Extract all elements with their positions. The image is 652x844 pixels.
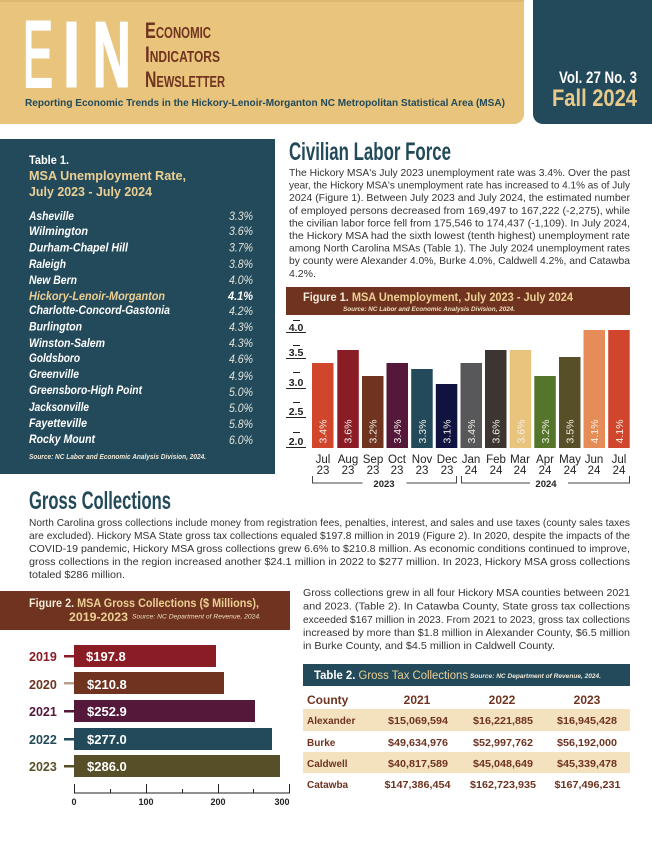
logo: EIN: E <box>23 2 53 106</box>
bar value labels: 3.6% <box>490 420 502 443</box>
text block: civilian labor force: 4.2%. <box>289 268 316 280</box>
month labels: Jan <box>462 454 480 466</box>
table 1 rows: Wilmington <box>29 226 88 238</box>
figure 1 header: Figure 1. MSA Unemployment, July 2023 - July 2024 <box>303 292 574 304</box>
table 2 rows: $40,817,589 <box>388 759 448 770</box>
bar value labels: 3.6% <box>516 420 528 443</box>
text block: gross collections intro: are excluded). Hickory MSA State gross tax collections equaled $197.8 million in 2019 (Figure 2). In 2020, despite the impacts of the <box>29 530 630 542</box>
bars with values: 2019 <box>29 650 57 664</box>
month labels: 24 <box>588 465 601 477</box>
table 1 heading <box>29 153 186 199</box>
masthead banner <box>0 0 524 124</box>
month labels: 24 <box>564 465 577 477</box>
text block: gross collections intro: North Carolina gross collections include money from registration fees, penalties, interest, and sales and use taxes (county sales taxes <box>29 517 630 529</box>
text block: gross collections by county: Gross collections grew in all four Hickory MSA counties between 2021 <box>303 587 630 599</box>
table 1 rows: New Bern <box>29 275 77 287</box>
text block: civilian labor force: by county were Alexander 4.0%, Burke 4.0%, Caldwell 4.2%, and Catawba <box>289 255 630 267</box>
table 2 rows: $45,339,478 <box>557 759 617 770</box>
table 1 rows: Greenville <box>29 369 80 381</box>
bars with values: $252.9 <box>87 704 127 719</box>
logo: EIN <box>23 2 131 106</box>
heading: Civilian Labor Force: Civilian Labor Force <box>289 138 451 166</box>
bar value labels: 4.1% <box>614 420 626 443</box>
table 2 header <box>303 664 630 686</box>
y axis: 3.5 <box>289 347 303 359</box>
table 1 heading: July 2023 - July 2024 <box>29 184 153 199</box>
table 1 rows: Goldsboro <box>29 353 80 365</box>
table 2 header: Table 2. Gross Tax Collections <box>314 670 468 682</box>
table 1 rows: Charlotte-Concord-Gastonia <box>29 305 171 317</box>
table 2 column headings: 2022 <box>489 693 516 707</box>
text block: gross collections by county: and 2023. (Table 2). In Catawba County, State gross tax collections <box>303 600 630 612</box>
chart: Figure 1 MSA unemployment <box>286 287 630 490</box>
table 2 rows: $15,069,594 <box>388 716 448 727</box>
table 1 rows <box>28 211 253 447</box>
bar value labels <box>318 420 626 443</box>
table 1 rows: 4.0% <box>229 275 253 287</box>
text block: gross collections intro: totaled $286 million. <box>29 569 125 581</box>
chart: Figure 2 gross collections <box>0 591 290 807</box>
bar value labels: 3.2% <box>368 420 380 443</box>
table: Table 2 gross tax collections <box>303 664 630 791</box>
month labels <box>316 454 626 477</box>
table 2 column headings <box>307 693 601 707</box>
table 1 rows: Burlington <box>29 322 82 334</box>
text block: civilian labor force: the Hickory MSA had the sixth lowest (tenth highest) unemployment rate <box>289 230 630 242</box>
bar value labels: 3.5% <box>564 420 576 443</box>
table 2 column headings: 2023 <box>574 693 601 707</box>
month labels: 23 <box>391 465 403 477</box>
table 1 rows: 4.3% <box>229 338 253 350</box>
x axis: 0 <box>71 797 77 807</box>
text block: gross collections intro <box>29 517 630 581</box>
table 1 rows: Raleigh <box>29 259 66 271</box>
month labels: 23 <box>441 465 453 477</box>
bar value labels: 3.2% <box>540 420 552 443</box>
x axis: 300 <box>274 797 290 807</box>
table 2 rows: $16,945,428 <box>557 716 617 727</box>
table 1 rows: 5.0% <box>229 403 253 415</box>
heading: Gross Collections: Gross Collections <box>29 487 171 515</box>
table 1 rows: Fayetteville <box>29 418 88 430</box>
month labels: 24 <box>613 465 626 477</box>
table 1 rows: 4.6% <box>229 354 253 366</box>
text block: gross collections by county: in Burke County, and $4.5 million in Caldwell County. <box>303 640 555 652</box>
table 2 header: Source: NC Department of Revenue, 2024. <box>470 673 601 680</box>
table 1 rows: 5.0% <box>229 387 253 399</box>
figure 1 header: Source: NC Labor and Economic Analysis Division, 2024. <box>343 306 515 313</box>
text block: civilian labor force <box>289 167 631 280</box>
text block: gross collections by county: exceeded $167 million in 2023. From 2021 to 2023, gross tax collections <box>303 614 630 626</box>
bars with values: $277.0 <box>87 732 127 747</box>
logo: EIN: N <box>93 2 131 106</box>
month labels: 24 <box>539 465 552 477</box>
table 1 rows: Winston-Salem <box>29 338 105 350</box>
table 1 heading: MSA Unemployment Rate, <box>29 168 186 183</box>
month labels: 24 <box>514 465 527 477</box>
month labels: Nov <box>412 454 432 466</box>
table 2 rows: $56,192,000 <box>557 738 617 749</box>
month labels: Oct <box>388 454 407 466</box>
y axis: 2.0 <box>289 436 303 448</box>
bars with values: $197.8 <box>86 649 126 664</box>
table 1 rows: Rocky Mount <box>29 434 96 446</box>
bar value labels: 3.4% <box>392 420 404 443</box>
text block: civilian labor force: 2024 (Figure 1). Between July 2023 and July 2024, the estimated number <box>289 192 630 204</box>
bar value labels: 3.4% <box>318 420 330 443</box>
month labels: 24 <box>490 465 503 477</box>
figure 1 header <box>286 287 630 315</box>
month labels: 23 <box>416 465 428 477</box>
table 1 rows: 5.8% <box>229 419 253 431</box>
text block: civilian labor force: the civilian labor force fell from 175,546 to 174,437 (-1,109). In July 2024, <box>289 217 630 229</box>
year brackets: 2024 <box>535 479 557 490</box>
text block: civilian labor force: of employed persons decreased from 169,497 to 167,222 (-2,275), while <box>289 205 630 217</box>
table 1 rows: 4.3% <box>229 322 253 334</box>
table 2 rows: $147,386,454 <box>384 780 451 791</box>
table 2 column headings: County <box>307 693 349 707</box>
row band: Alexander <box>303 709 630 731</box>
month labels: 24 <box>465 465 478 477</box>
newsletter name: NEWSLETTER <box>145 67 225 92</box>
table 1 rows: Durham-Chapel Hill <box>29 242 129 254</box>
table 1 rows: 4.9% <box>229 371 253 383</box>
logo: EIN: I <box>63 2 80 106</box>
table 1 heading: Table 1. <box>29 153 69 167</box>
table 2 rows: $167,496,231 <box>554 780 621 791</box>
x axis: 200 <box>210 797 226 807</box>
month labels: Dec <box>437 454 457 466</box>
month labels: Feb <box>486 454 506 466</box>
table 2 rows: $49,634,976 <box>388 738 448 749</box>
bars with values: 2023 <box>29 760 57 774</box>
table 1 rows: 3.7% <box>229 242 253 254</box>
table 2 rows <box>307 716 621 791</box>
table 1 rows: 3.8% <box>229 259 253 271</box>
month labels: Mar <box>510 454 530 466</box>
table 1 rows: 6.0% <box>229 435 253 447</box>
bars with values: $286.0 <box>87 759 127 774</box>
month labels: 23 <box>367 465 379 477</box>
month labels: May <box>559 454 581 466</box>
text block: civilian labor force: among North Carolina MSAs (Table 1). The July 2024 unemployment rates <box>289 243 630 255</box>
figure 2 header: Source: NC Department of Revenue, 2024. <box>132 614 261 620</box>
text block: gross collections intro: gross collections in the region increased another $24.1 million in 2022 to $277 million. In 2023, Hickory MSA gross collections <box>29 556 630 568</box>
month labels: Jun <box>585 454 603 466</box>
table 2 rows: Alexander <box>307 716 355 727</box>
y axis <box>286 320 306 448</box>
panel: Table 1 MSA unemployment rate <box>0 139 275 474</box>
y axis: 3.0 <box>289 377 303 389</box>
month labels: Sep <box>363 454 383 466</box>
table 1 rows: Greensboro-High Point <box>29 385 143 397</box>
x axis <box>71 784 290 807</box>
table 2 rows: $16,221,885 <box>473 716 533 727</box>
table 1 rows: Jacksonville <box>29 402 90 414</box>
issue badge <box>533 0 652 124</box>
bars with values: $210.8 <box>87 677 127 692</box>
table 1 rows: Asheville <box>28 211 75 223</box>
bars with values: 2020 <box>29 678 57 692</box>
x axis: 100 <box>138 797 154 807</box>
table 1 rows: 3.3% <box>229 211 253 223</box>
month labels: Jul <box>316 454 330 466</box>
bar value labels: 3.4% <box>466 420 478 443</box>
table 2 rows: Caldwell <box>307 759 348 770</box>
bar value labels: 4.1% <box>589 420 601 443</box>
text block: civilian labor force: The Hickory MSA's July 2023 unemployment rate was 3.4%. Over the past <box>289 167 630 179</box>
table 1 rows: 3.6% <box>229 226 253 238</box>
table 2 rows: Catawba <box>307 780 349 791</box>
figure 2 header <box>0 591 290 630</box>
newsletter name <box>145 18 225 92</box>
bar value labels: 3.1% <box>442 420 454 443</box>
month labels: Aug <box>338 454 358 466</box>
bar value labels: 3.3% <box>417 420 429 443</box>
text block: civilian labor force: year, the Hickory MSA's unemployment rate has increased to 4.1% as of July <box>289 180 631 192</box>
figure 2 header: 2019-2023 <box>69 612 128 624</box>
table 1 source: Source: NC Labor and Economic Analysis Division, 2024. <box>29 454 206 461</box>
table 2 rows: $52,997,762 <box>473 738 533 749</box>
table 2 column headings: 2021 <box>404 693 431 707</box>
newsletter name: ECONOMIC <box>145 18 211 43</box>
y axis: 2.5 <box>289 406 303 418</box>
bars with values: 2021 <box>29 705 57 719</box>
bars <box>312 330 630 448</box>
bars with values <box>29 645 280 777</box>
y axis: 4.0 <box>289 322 303 334</box>
year brackets: 2023 <box>373 479 395 490</box>
table 2 rows: $45,048,649 <box>473 759 533 770</box>
year brackets <box>312 476 630 490</box>
text block: gross collections by county: increased by more than $1.8 million in Alexander County, $6.5 million <box>303 627 630 639</box>
table 2 rows: Burke <box>307 738 336 749</box>
table 1 rows: 4.2% <box>229 306 253 318</box>
month labels: 23 <box>317 465 329 477</box>
issue badge: Fall 2024 <box>552 85 638 112</box>
bars with values: 2022 <box>29 733 57 747</box>
row band: Caldwell <box>303 752 630 773</box>
table 1 rows: Hickory-Lenoir-Morganton <box>29 291 165 303</box>
month labels: Jul <box>612 454 626 466</box>
tagline: Reporting Economic Trends in the Hickory-Lenoir-Morganton NC Metropolitan Statistical Area (MSA) <box>25 97 505 109</box>
table 2 rows: $162,723,935 <box>470 780 536 791</box>
table 1 rows: 4.1% <box>227 291 253 303</box>
newsletter name: INDICATORS <box>145 42 220 67</box>
text block: gross collections intro: COVID-19 pandemic, Hickory MSA gross collections grew 6.6% to $210.8 million. As economic conditions continued to improve, <box>29 543 630 555</box>
text block: gross collections by county <box>303 587 630 652</box>
figure 2 header: Figure 2. MSA Gross Collections ($ Millions), <box>29 598 259 610</box>
bar value labels: 3.6% <box>342 420 354 443</box>
month labels: Apr <box>536 454 554 466</box>
month labels: 23 <box>342 465 354 477</box>
